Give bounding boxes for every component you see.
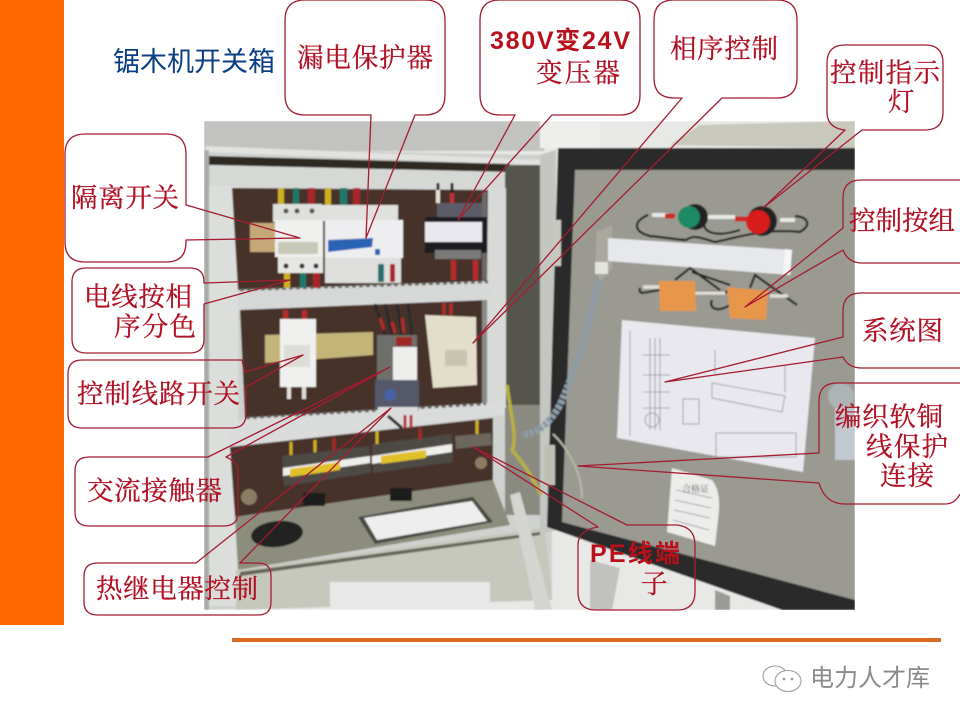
callout: 控制按组: 控制按组 (849, 206, 955, 236)
callout: 漏电保护器 (285, 0, 445, 238)
green indicator lamp (678, 204, 708, 230)
door bolt (828, 383, 855, 460)
red indicator lamp (746, 206, 777, 236)
cabinet floor (235, 480, 510, 570)
door frame (547, 148, 855, 610)
lower mounting plate (230, 418, 493, 517)
callout: 漏电保护器: 漏电保护器 (297, 43, 433, 73)
callout: 编织软铜线保护连接: 线保护 (866, 432, 948, 462)
copper earth wire (553, 434, 582, 498)
callout: 编织软铜线保护连接: 连接 (880, 461, 934, 491)
round knockout (250, 520, 304, 548)
white cable trunking (608, 238, 792, 275)
callout: 380V变24V变压器: 变压器 (536, 58, 620, 88)
callout: 系统图 (665, 293, 960, 382)
callout: 控制指示灯: 灯 (888, 87, 914, 117)
middle mounting plate (240, 300, 487, 418)
cabinet body (204, 146, 556, 610)
callout: 编织软铜线保护连接: 编织软铜 (835, 402, 943, 432)
callout: 电线按相序分色: 序分色 (114, 312, 196, 342)
photo: open distribution cabinet (204, 121, 855, 610)
certificate label (667, 468, 719, 546)
isolating switch (250, 188, 323, 288)
lower shelf (228, 402, 505, 447)
callout: 控制线路开关 (68, 355, 303, 428)
callout: 控制指示灯: 控制指示 (830, 58, 940, 88)
title: 锯木机开关箱 (113, 47, 275, 77)
din rail (265, 332, 373, 363)
callout: 380V变24V变压器: 380V变24V (490, 27, 630, 55)
upper shelf (238, 281, 490, 310)
callout: PE线端子 (473, 447, 695, 610)
cable hole (358, 497, 493, 544)
earth wire (507, 385, 541, 495)
control transformer (425, 183, 487, 280)
callout: 交流接触器 (75, 367, 390, 526)
indicator lamp wiring (637, 215, 807, 242)
orange side band (0, 0, 64, 625)
callout: 相序控制 (473, 0, 797, 343)
callout: 热继电器控制: 热继电器控制 (96, 574, 258, 604)
callout: 隔离开关 (65, 134, 300, 262)
AC contactor (375, 304, 417, 385)
circuit diagram sheet (617, 320, 815, 472)
callout: 电线按相序分色 (72, 268, 290, 353)
callout: 系统图: 系统图 (862, 316, 943, 346)
callout: PE线端子: 子 (641, 569, 668, 599)
orange push button right (727, 287, 768, 320)
watermark: wechat icon and account name: 电力人才库 (810, 665, 930, 692)
cable bracket (595, 225, 612, 282)
footer rule (232, 638, 941, 642)
callout: 相序控制: 相序控制 (670, 34, 778, 64)
phase sequence relay (425, 303, 477, 388)
icon: wechat bubbles (763, 666, 801, 692)
thermal relay (375, 380, 419, 428)
callout: 热继电器控制 (84, 408, 391, 615)
residual current breaker (322, 188, 403, 283)
callout: 交流接触器: 交流接触器 (87, 476, 222, 506)
callout: 控制线路开关: 控制线路开关 (77, 379, 240, 409)
terminal blocks (282, 420, 492, 506)
callout: 控制指示灯 (763, 45, 943, 208)
callout: PE线端子: PE线端 (590, 540, 680, 568)
control circuit switch (280, 310, 316, 399)
door latch and hinge (545, 220, 561, 485)
stand legs under door (590, 560, 730, 610)
callout: 电线按相序分色: 电线按相 (84, 282, 192, 312)
certificate label: 合格证 (682, 483, 709, 494)
callout: 隔离开关: 隔离开关 (71, 183, 179, 213)
callout: 380V变24V变压器 (458, 0, 640, 220)
callout: 控制按组 (745, 180, 960, 307)
button wiring (640, 268, 797, 309)
door inner panel (562, 170, 855, 600)
callout: 编织软铜线保护连接 (578, 383, 960, 504)
orange push button left (659, 281, 696, 311)
spiral hose (522, 274, 600, 435)
upper mounting plate (232, 188, 488, 290)
